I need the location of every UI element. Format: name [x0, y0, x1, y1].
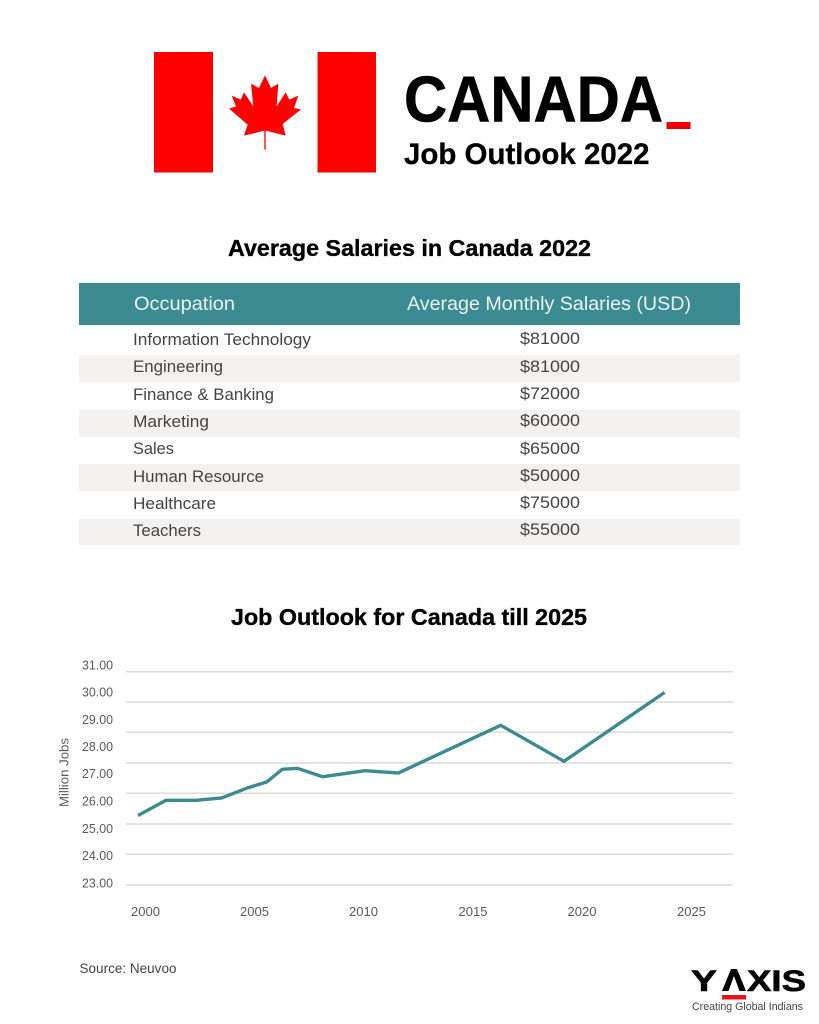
y axis labels — [82, 658, 113, 890]
title: Canada: CANADA — [404, 62, 663, 136]
row: Human Resource: $50000 — [520, 466, 580, 485]
x axis labels: 2025 — [677, 905, 706, 919]
row: Human Resource: Human Resource — [133, 467, 264, 486]
row: Sales — [133, 439, 580, 458]
row: Engineering: $81000 — [520, 357, 580, 376]
y axis title: Million Jobs — [58, 738, 72, 807]
icon: Canadian flag — [154, 52, 376, 172]
row: Finance and Banking: $72000 — [520, 384, 580, 403]
y axis labels: 30.00 — [82, 686, 113, 700]
row: Marketing — [79, 410, 740, 437]
icon: maple leaf — [229, 75, 301, 150]
source note: Source: Neuvoo — [80, 961, 176, 976]
row: Marketing: $60000 — [520, 411, 580, 430]
x axis labels: 2000 — [131, 905, 160, 919]
row: Sales: $65000 — [520, 439, 580, 458]
title accent: red underscore — [666, 122, 690, 129]
y axis labels: 28.00 — [82, 740, 113, 754]
y axis labels: 25.00 — [82, 822, 113, 836]
logo: Y-Axis: XIS — [747, 965, 806, 998]
row: Finance and Banking — [133, 384, 580, 404]
y axis labels: 24.00 — [82, 849, 113, 863]
y axis labels: 26.00 — [82, 794, 113, 808]
row: Information Technology: $81000 — [520, 329, 580, 348]
x axis labels — [131, 905, 706, 919]
x axis labels: 2005 — [240, 905, 269, 919]
row: Engineering: Engineering — [133, 357, 223, 376]
row: Finance and Banking: Finance & Banking — [133, 385, 274, 404]
y axis labels: 29.00 — [82, 713, 113, 727]
row: Healthcare — [133, 493, 580, 513]
row: Human Resource — [79, 464, 740, 491]
row: Teachers — [79, 519, 740, 545]
row: Healthcare: $75000 — [520, 493, 580, 512]
logo: Y-Axis: Y — [691, 965, 717, 998]
x axis labels: 2020 — [568, 905, 597, 919]
y axis labels: 31.00 — [82, 658, 113, 672]
row: Teachers: Teachers — [133, 521, 201, 540]
data line — [138, 692, 664, 816]
subtitle: Job Outlook 2022: Job Outlook 2022 — [404, 138, 650, 171]
logo: Y-Axis — [691, 965, 806, 1013]
row: Teachers: $55000 — [520, 520, 580, 539]
row: Sales: Sales — [133, 439, 174, 458]
logo tagline: Creating Global Indians — [692, 1001, 803, 1013]
row: Information Technology: Information Technology — [133, 330, 312, 349]
heading: job outlook chart: Job Outlook for Canada till 2025 — [231, 604, 587, 630]
panel: salary table — [79, 283, 740, 545]
y axis labels: 23.00 — [82, 876, 113, 890]
x axis labels: 2015 — [458, 905, 488, 919]
row: Engineering — [79, 355, 740, 382]
heading: average salaries: Average Salaries in Canada 2022 — [228, 235, 591, 261]
table header: Average Monthly Salaries (USD) — [407, 293, 691, 315]
row: Marketing: Marketing — [133, 412, 209, 431]
row: Healthcare: Healthcare — [133, 494, 216, 513]
table header — [79, 283, 740, 325]
line chart: jobs in millions — [58, 658, 733, 919]
x axis labels: 2010 — [349, 905, 378, 919]
y axis labels: 27.00 — [82, 767, 113, 781]
row: Information Technology — [133, 329, 580, 349]
table header: Occupation — [134, 293, 235, 315]
